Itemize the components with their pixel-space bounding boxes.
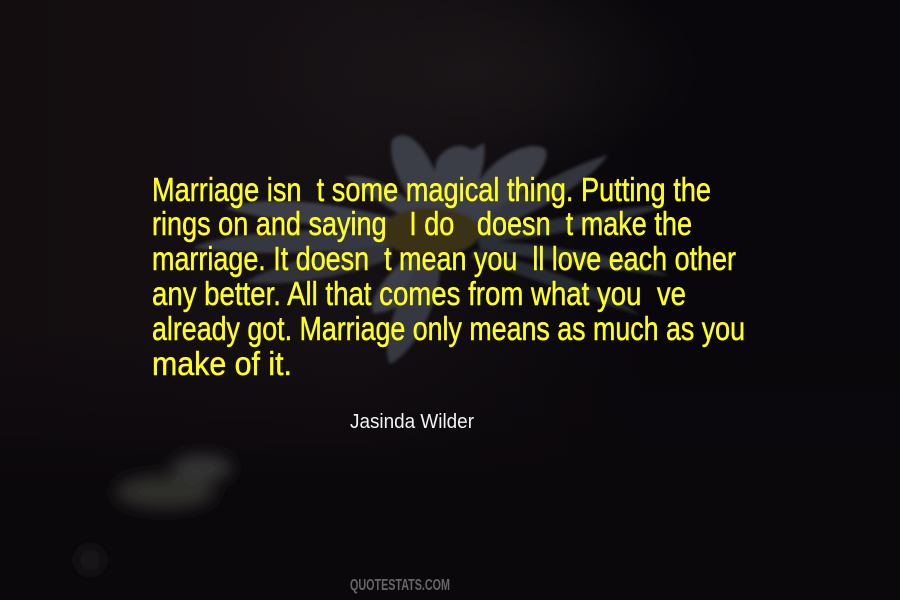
quote text: any better. All that comes from what you ve	[152, 275, 686, 312]
flower centre	[380, 208, 480, 256]
blurred background highlights	[79, 455, 232, 571]
quote text	[152, 171, 745, 382]
quote text: rings on and saying I do doesn t make the	[152, 205, 692, 242]
quote text: marriage. It doesn t mean you ll love each other	[152, 240, 736, 277]
watermark: QUOTESTATS.COM	[350, 577, 450, 594]
quote text: already got. Marriage only means as much as you	[152, 310, 745, 347]
daisy flower	[193, 135, 670, 364]
author: Jasinda Wilder	[350, 411, 474, 433]
quote text: Marriage isn t some magical thing. Putting the	[152, 171, 711, 208]
quote text: make of it.	[152, 345, 292, 382]
petals	[193, 135, 670, 364]
